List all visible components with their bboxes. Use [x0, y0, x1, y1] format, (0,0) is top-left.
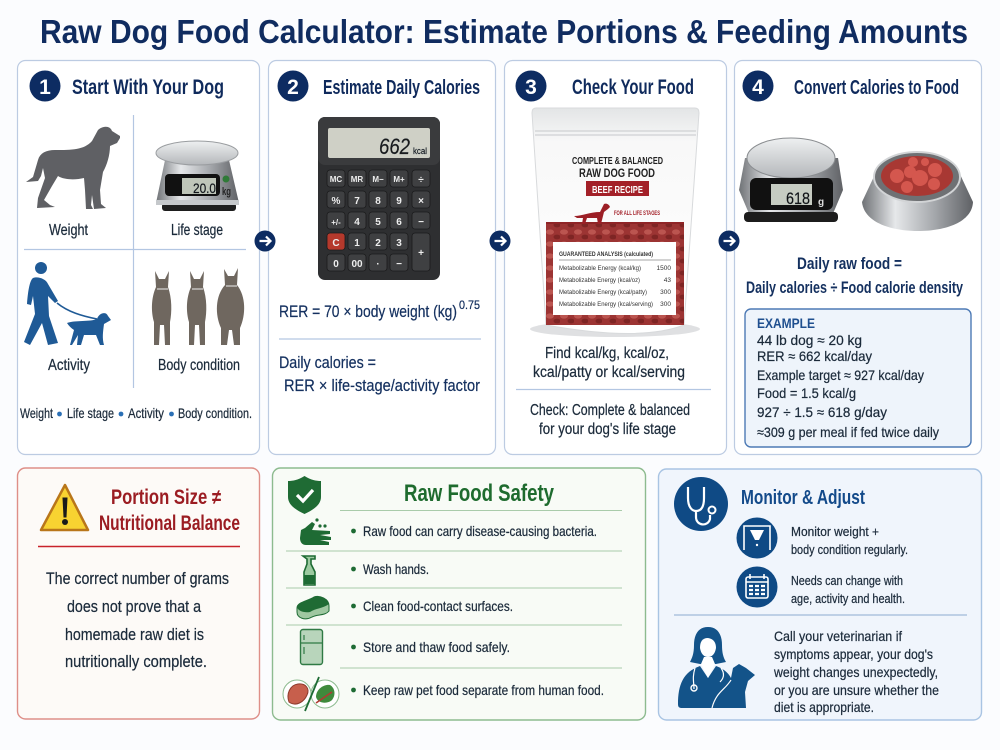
icon: calculator showing 662 kcal: +: [418, 248, 424, 259]
text: monitor weight: body condition regularly.: [791, 542, 908, 557]
step 4 badge: [742, 70, 774, 102]
text: call your veterinarian: [773, 628, 939, 715]
icon: raw dog food bag with label: 43: [664, 277, 671, 284]
label: body condition: Body condition: [158, 357, 240, 374]
icon: calculator showing 662 kcal: 662: [379, 134, 410, 159]
icon: calculator showing 662 kcal: M−: [372, 175, 384, 184]
panel: step 1 start with your dog: [18, 60, 260, 454]
text: check complete and balanced: for your dog's life stage: [539, 421, 676, 438]
icon: calculator showing 662 kcal: 0: [333, 259, 339, 270]
step 2 heading: Estimate Daily Calories: [323, 77, 480, 99]
summary line: Weight: [20, 405, 53, 421]
callout: worked example: Example target ≈ 927 kcal/day: [757, 367, 924, 383]
callout: worked example: 44 lb dog ≈ 20 kg: [757, 332, 862, 348]
icon: calculator showing 662 kcal: M+: [393, 175, 405, 184]
icon: scale showing 618 g: 618: [786, 189, 810, 208]
icon: person walking dog: [24, 262, 111, 345]
icon: refrigerator: [300, 630, 322, 664]
step 2 badge: [278, 70, 308, 102]
icon: calculator showing 662 kcal: kcal: [413, 146, 427, 156]
summary line: Life stage: [67, 405, 114, 421]
text: find calorie density: Find kcal/kg, kcal/oz,: [545, 345, 669, 362]
icon: calculator showing 662 kcal: MC: [330, 175, 342, 184]
panel: step 4 convert calories to food: [734, 60, 982, 454]
icon: raw dog food bag with label: Metabolizable Energy (kcal/kg): [559, 265, 641, 272]
formula: daily raw food: [746, 254, 963, 297]
icon: calculator showing 662 kcal: [318, 117, 440, 280]
icon: raw meat separated from greens: [283, 677, 339, 711]
arrow: step 2 to 3: [490, 230, 510, 252]
safety item: store and thaw: Store and thaw food safely.: [363, 639, 510, 655]
step 2 badge: 2: [287, 76, 299, 99]
text: call your veterinarian: diet is appropriate.: [774, 699, 874, 715]
text: find calorie density: kcal/patty or kcal/serving: [533, 364, 685, 381]
icon: calculator showing 662 kcal: C: [332, 238, 340, 249]
monitor heading: Monitor & Adjust: [741, 487, 865, 509]
icon: raw dog food bag with label: RAW DOG FOOD: [579, 166, 655, 180]
formula: daily calories: Daily calories =: [279, 353, 376, 372]
text: call your veterinarian: symptoms appear, your dog's: [774, 646, 933, 662]
panel: portion size warning: [18, 468, 260, 719]
formula: RER: 0.75: [459, 298, 480, 312]
step 1 badge: [30, 70, 60, 102]
icon: calculator showing 662 kcal: 00: [351, 259, 363, 270]
icon: calculator showing 662 kcal: −: [418, 217, 424, 228]
safety item: bacteria: Raw food can carry disease-causing bacteria.: [363, 523, 597, 539]
step 1 badge: 1: [39, 76, 51, 99]
icon: calculator showing 662 kcal: %: [332, 196, 341, 207]
arrow: step 1 to 2: [254, 230, 276, 252]
icon: calculator showing 662 kcal: 9: [396, 196, 402, 207]
icon: raw dog food bag with label: Metabolizable Energy (kcal/patty): [559, 289, 647, 296]
icon: dog silhouette: [26, 127, 120, 209]
warning body text: homemade raw diet is: [65, 626, 204, 644]
icon: raw dog food bag with label: BEEF RECIPE: [592, 185, 643, 196]
icon: calculator showing 662 kcal: 4: [354, 217, 360, 228]
text: call your veterinarian: weight changes unexpectedly,: [773, 664, 938, 680]
text: call your veterinarian: or you are unsure whether the: [774, 682, 939, 698]
icon: calculator showing 662 kcal: 6: [396, 217, 402, 228]
formula: RER: RER = 70 × body weight (kg): [279, 302, 457, 321]
step 3 badge: 3: [525, 76, 537, 99]
icon: raw dog food bag with label: COMPLETE & BALANCED: [572, 155, 663, 167]
warning body text: nutritionally complete.: [65, 653, 207, 671]
icon: calculator showing 662 kcal: ÷: [418, 175, 424, 186]
icon: calculator showing 662 kcal: 3: [396, 238, 402, 249]
label: life stage: Life stage: [171, 222, 223, 239]
icon: spray bottle: [303, 556, 315, 585]
text: check complete and balanced: [530, 402, 690, 438]
icon: calculator showing 662 kcal: −: [396, 259, 402, 270]
panel: step 3 check your food: [504, 60, 726, 454]
icon: raw dog food bag with label: 1500: [657, 265, 671, 272]
step 3 heading: Check Your Food: [572, 76, 694, 99]
summary line: Activity: [128, 405, 164, 421]
formula: daily raw food: Daily raw food =: [797, 254, 902, 273]
icon: calculator showing 662 kcal: MR: [351, 175, 363, 184]
step 3 badge: [516, 70, 546, 102]
icon: scale showing 618 g: [739, 138, 843, 222]
text: check complete and balanced: Check: Complete & balanced: [530, 402, 690, 419]
icon: veterinarian with dog: [678, 627, 755, 708]
text: needs can change: age, activity and health.: [791, 591, 905, 606]
icon: calculator showing 662 kcal: ×: [418, 196, 424, 207]
icon: raw dog food bag with label: 300: [660, 289, 671, 296]
icon: calculator showing 662 kcal: ·: [376, 259, 380, 270]
warning body text: [46, 570, 229, 671]
icon: calculator showing 662 kcal: 1: [354, 238, 360, 249]
summary line: Body condition.: [178, 405, 252, 421]
label: activity: Activity: [48, 357, 90, 374]
icon: sponge: [297, 596, 329, 619]
icon: raw dog food bag with label: [530, 108, 700, 337]
icon: steel bowl of raw food: [862, 152, 973, 231]
icon: washing hands: [300, 518, 331, 545]
icon: kitchen scale with 20.0 kg: kg: [222, 186, 231, 198]
icon: raw dog food bag with label: GUARANTEED ANALYSIS (calculated): [559, 251, 653, 258]
callout: worked example: 927 ÷ 1.5 ≈ 618 g/day: [757, 404, 887, 420]
callout: worked example: ≈309 g per meal if fed twice daily: [757, 424, 939, 440]
warning body text: does not prove that a: [67, 598, 202, 616]
callout: worked example: RER ≈ 662 kcal/day: [757, 348, 872, 364]
warning body text: The correct number of grams: [46, 570, 229, 588]
text: monitor weight: Monitor weight +: [791, 524, 879, 539]
step 1 heading: Start With Your Dog: [72, 76, 224, 99]
label: weight: Weight: [49, 222, 89, 239]
text: find calorie density: [533, 345, 685, 381]
icon: raw dog food bag with label: 300: [660, 301, 671, 308]
arrow: step 3 to 4: [718, 230, 740, 252]
icon: calculator showing 662 kcal: 7: [354, 196, 360, 207]
icon: stethoscope: [674, 477, 728, 531]
icon: safety shield: [288, 476, 321, 514]
icon: kitchen scale with 20.0 kg: 20.0: [193, 180, 216, 196]
icon: kitchen scale with 20.0 kg: [156, 141, 239, 211]
formula: daily calories: [279, 353, 480, 395]
text: monitor weight: [791, 524, 908, 557]
icon: raw dog food bag with label: Metabolizable Energy (kcal/oz): [559, 277, 640, 284]
callout: worked example: EXAMPLE: [757, 315, 815, 331]
callout: worked example: Food = 1.5 kcal/g: [757, 385, 856, 401]
icon: calculator showing 662 kcal: 5: [375, 217, 381, 228]
safety item: wash hands: Wash hands.: [363, 561, 429, 577]
step 4 badge: 4: [752, 76, 764, 99]
text: call your veterinarian: Call your veterinarian if: [774, 628, 902, 644]
warning heading: Nutritional Balance: [99, 512, 240, 535]
panel: raw food safety: [272, 468, 646, 720]
text: needs can change: [791, 573, 905, 606]
icon: calendar: [736, 566, 778, 608]
safety heading: Raw Food Safety: [404, 480, 555, 507]
icon: raw dog food bag with label: Metabolizable Energy (kcal/serving): [559, 301, 653, 308]
icon: raw dog food bag with label: FOR ALL LIFE STAGES: [614, 211, 660, 217]
safety item: clean surfaces: Clean food-contact surfaces.: [363, 598, 513, 614]
icon: three dogs showing body condition: [152, 268, 244, 345]
summary line: [20, 405, 252, 421]
icon: warning triangle: [41, 485, 88, 530]
warning heading: Portion Size ≠: [111, 486, 221, 509]
icon: weighing doorway: [736, 518, 778, 558]
icon: scale showing 618 g: g: [818, 197, 824, 208]
icon: calculator showing 662 kcal: 8: [375, 196, 381, 207]
warning heading: [99, 486, 240, 535]
callout: worked example: [745, 309, 971, 447]
icon: calculator showing 662 kcal: +/-: [331, 218, 341, 227]
text: needs can change: Needs can change with: [791, 573, 903, 588]
formula: daily calories: RER × life-stage/activity factor: [284, 376, 480, 395]
panel: monitor and adjust: [658, 469, 982, 720]
safety item: keep separate: Keep raw pet food separate from human food.: [363, 682, 604, 698]
icon: calculator showing 662 kcal: 2: [375, 238, 381, 249]
panel: step 2 estimate daily calories: [268, 60, 496, 454]
